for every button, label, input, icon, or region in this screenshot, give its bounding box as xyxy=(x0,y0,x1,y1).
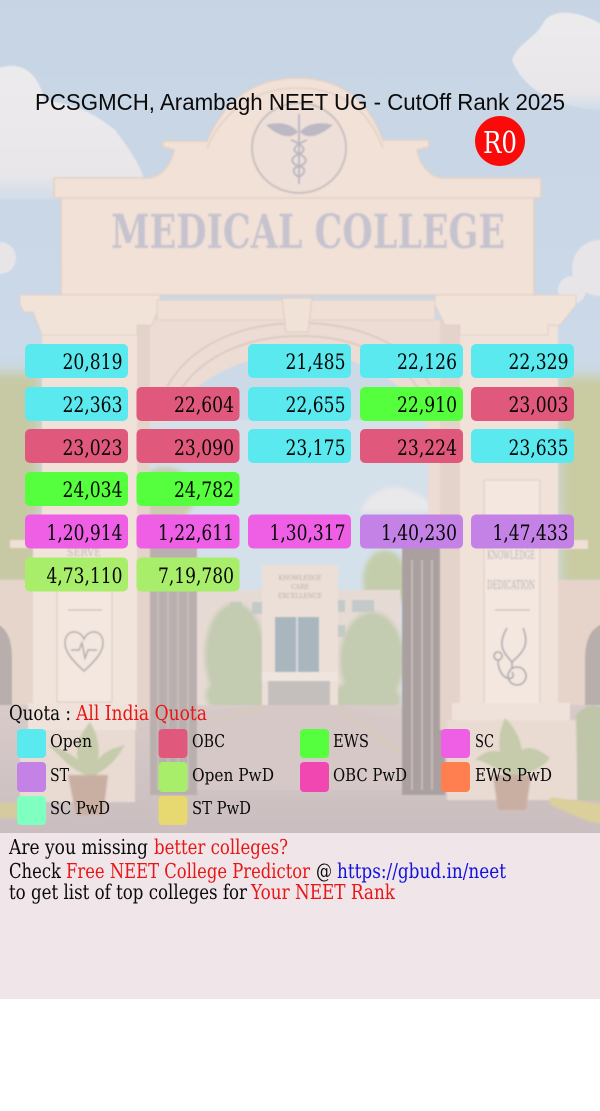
legend: Open PwD xyxy=(192,765,274,786)
row 6 chips: 4,73,110 xyxy=(46,564,122,588)
icon: heart xyxy=(65,632,103,671)
row 6 chips: 7,19,780 xyxy=(158,564,234,588)
legend: SC PwD xyxy=(50,798,110,819)
row 4 chips: 24,034 xyxy=(62,478,122,502)
quota line: All India Quota xyxy=(75,701,207,725)
legend: Open xyxy=(50,731,92,752)
row 3 chips: 23,023 xyxy=(62,436,122,460)
promo text: missing better colleges xyxy=(8,835,288,859)
row 2 chips: 23,003 xyxy=(508,393,568,417)
promo text: predictor link xyxy=(9,859,507,883)
row 5 chips: 1,20,914 xyxy=(46,521,122,545)
legend: OBC PwD xyxy=(333,765,407,786)
row 5 chips: 1,22,611 xyxy=(158,521,234,545)
row 3 chips xyxy=(25,429,574,463)
row 2 chips xyxy=(25,387,574,421)
row 2 chips: 22,604 xyxy=(174,393,234,417)
promo text: predictor link: @ xyxy=(316,859,332,883)
row 2 chips: 22,363 xyxy=(62,393,122,417)
title: PCSGMCH, Arambagh NEET UG - CutOff Rank 2025 xyxy=(35,89,565,115)
row 1 chips xyxy=(25,344,574,378)
row 3 chips: 23,635 xyxy=(508,436,568,460)
legend: ST PwD xyxy=(192,798,251,819)
opening showing sky and campus: EXCELLENCE xyxy=(278,593,322,600)
row 5 chips: 1,40,230 xyxy=(381,521,457,545)
legend: EWS PwD xyxy=(475,765,552,786)
legend: EWS xyxy=(333,731,369,752)
row 1 chips: 22,126 xyxy=(397,350,457,374)
pillars: KNOWLEDGE xyxy=(487,548,535,562)
row 2 chips: 22,910 xyxy=(397,393,457,417)
background: medical college gate illustration xyxy=(0,0,600,850)
side walls xyxy=(0,540,600,740)
row 1 chips: 20,819 xyxy=(62,350,122,374)
ground and road xyxy=(0,705,600,845)
pediment with caduceus xyxy=(54,78,541,295)
row 3 chips: 23,224 xyxy=(397,436,457,460)
promo text: missing better colleges: better colleges? xyxy=(154,835,288,859)
opening showing sky and campus: KNOWLEDGE xyxy=(278,575,322,582)
legend: ST xyxy=(50,765,69,786)
side trees xyxy=(0,372,600,587)
promo text: missing better colleges: Are you missing xyxy=(8,835,148,859)
promo text: predictor link: https://gbud.in/neet xyxy=(337,859,507,883)
row 5 chips xyxy=(25,514,574,548)
legend xyxy=(17,729,552,825)
row 4 chips xyxy=(25,472,240,506)
promo panel xyxy=(0,833,600,999)
quota line: Quota : xyxy=(9,701,71,725)
pillars: DEDICATION xyxy=(487,578,535,592)
badge: round R0: R0 xyxy=(483,126,517,161)
row 2 chips: 22,655 xyxy=(286,393,346,417)
legend: OBC xyxy=(192,731,225,752)
rank grid xyxy=(25,344,574,592)
opening showing sky and campus xyxy=(135,420,440,720)
row 5 chips: 1,30,317 xyxy=(270,521,346,545)
opening showing sky and campus: CARE xyxy=(291,584,309,591)
quota line xyxy=(9,701,207,725)
legend: SC xyxy=(475,731,494,752)
row 4 chips: 24,782 xyxy=(174,478,234,502)
row 6 chips xyxy=(25,558,240,592)
row 1 chips: 22,329 xyxy=(508,350,568,374)
icon: stethoscope xyxy=(494,628,526,685)
pillars xyxy=(20,295,577,802)
row 1 chips: 21,485 xyxy=(286,350,346,374)
promo text: top colleges for rank: to get list of top colleges for xyxy=(9,880,247,904)
row 5 chips: 1,47,433 xyxy=(492,521,568,545)
row 3 chips: 23,090 xyxy=(174,436,234,460)
promo text: top colleges for rank: Your NEET Rank xyxy=(250,880,395,904)
arch and frieze xyxy=(130,320,445,540)
promo text: predictor link: Check xyxy=(9,859,61,883)
potted plants xyxy=(0,706,600,825)
pillars: SERVE xyxy=(67,546,101,559)
gate bars xyxy=(150,540,445,795)
promo text: predictor link: Free NEET College Predictor xyxy=(66,859,310,883)
row 3 chips: 23,175 xyxy=(286,436,346,460)
badge: round R0 xyxy=(475,116,525,166)
